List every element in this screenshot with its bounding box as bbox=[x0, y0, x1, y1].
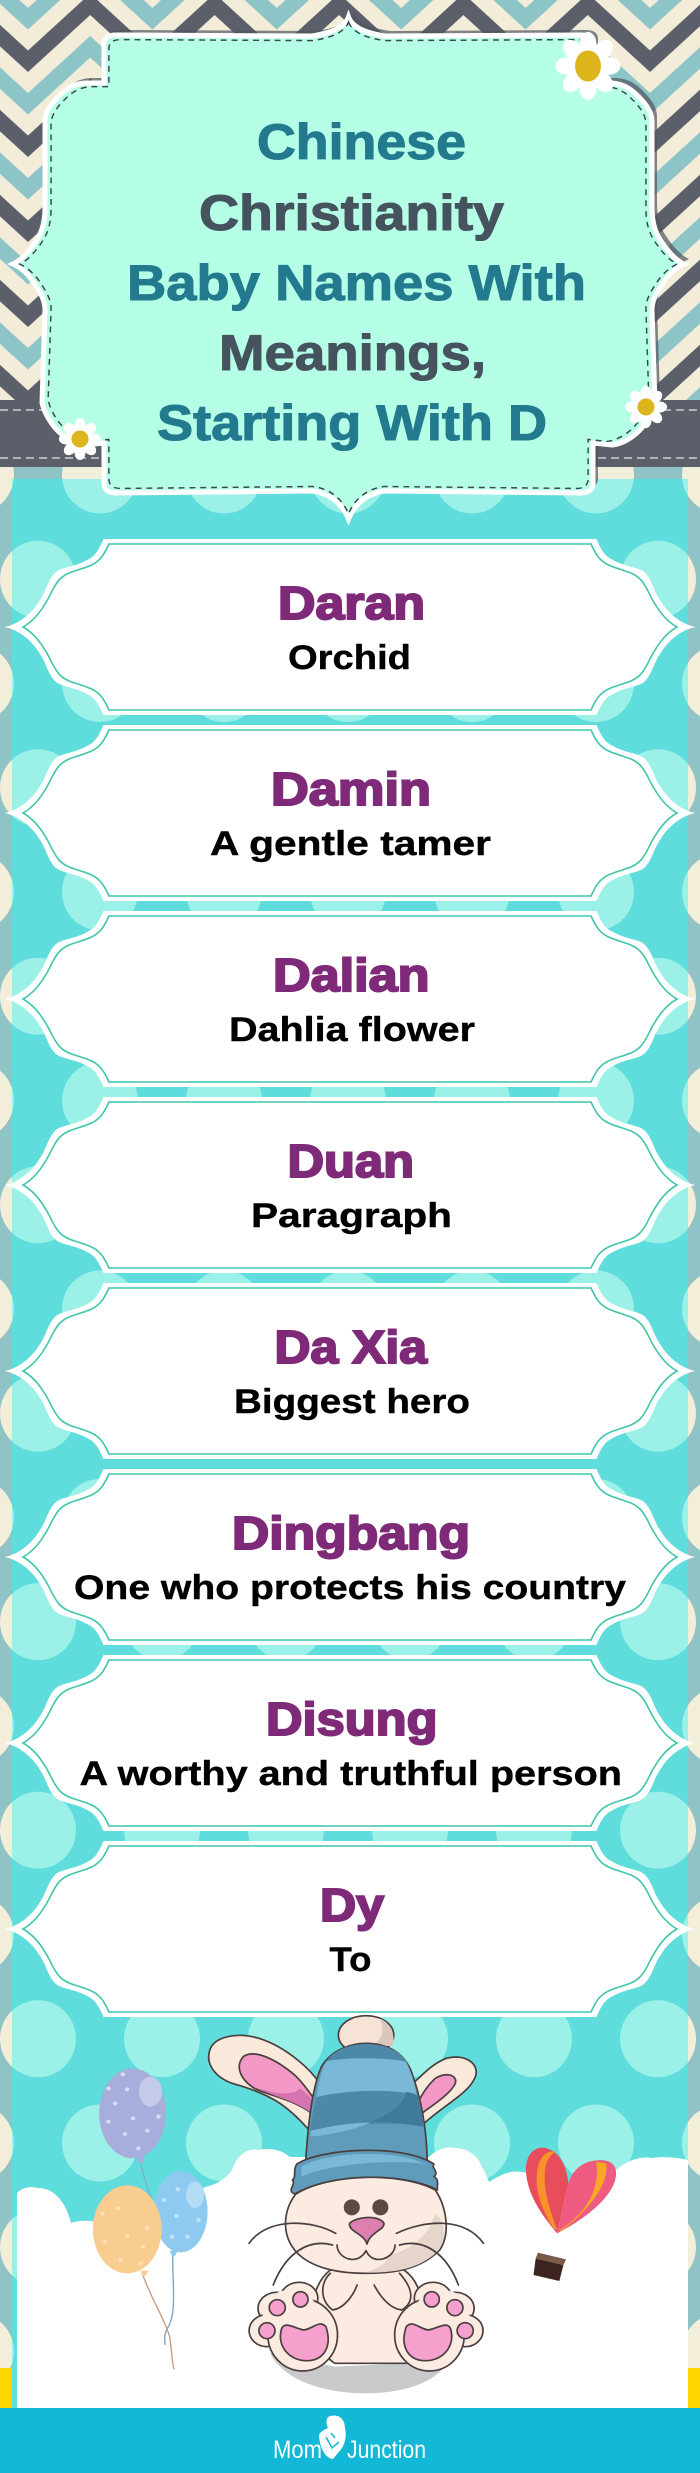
footer bar bbox=[0, 2408, 700, 2473]
title: Meanings, bbox=[219, 325, 486, 381]
panel: Duan: Paragraph bbox=[251, 1197, 452, 1235]
title: Baby Names With bbox=[127, 255, 586, 311]
panel: Damin: Damin bbox=[271, 763, 431, 815]
logo: MomJunction: Mom bbox=[273, 2436, 322, 2464]
icon: daisy left bbox=[59, 418, 101, 460]
chevron header background bbox=[0, 0, 700, 467]
panel: Daran: Orchid bbox=[288, 639, 411, 677]
panel: Da Xia bbox=[4, 1283, 696, 1459]
panel: Dalian: Dalian bbox=[273, 949, 430, 1001]
panel: Dy: Dy bbox=[320, 1879, 384, 1931]
panel: Da Xia: Da Xia bbox=[274, 1321, 427, 1373]
panel: Duan: Duan bbox=[288, 1135, 414, 1187]
panel: Dy bbox=[4, 1841, 696, 2017]
panel: Daran: Daran bbox=[278, 577, 425, 629]
panel: Dingbang: One who protects his country bbox=[74, 1569, 626, 1607]
title: Chinese bbox=[257, 114, 466, 170]
polka dot background bbox=[0, 467, 700, 2408]
panel: Dingbang bbox=[4, 1469, 696, 1645]
icon: daisy top right bbox=[555, 32, 621, 100]
icon: balloons bbox=[93, 2068, 208, 2369]
panel: Daran bbox=[4, 539, 696, 715]
icon: heart hot-air balloon bbox=[526, 2148, 616, 2281]
title: Christianity bbox=[199, 185, 504, 241]
panel: Disung: A worthy and truthful person bbox=[80, 1755, 622, 1793]
panel: Damin bbox=[4, 725, 696, 901]
logo: MomJunction: Junction bbox=[347, 2436, 426, 2464]
panel: Dalian: Dahlia flower bbox=[229, 1011, 475, 1049]
title: Starting With D bbox=[157, 395, 547, 451]
icon: daisy right bbox=[625, 386, 667, 428]
panel: Disung bbox=[4, 1655, 696, 1831]
illustration bbox=[93, 2016, 616, 2393]
panel: Dy: To bbox=[330, 1941, 372, 1979]
panel: Dingbang: Dingbang bbox=[232, 1507, 470, 1559]
title bbox=[127, 114, 586, 451]
white clouds bbox=[17, 2147, 688, 2408]
icon: bunny bbox=[209, 2016, 483, 2393]
icon: mother and child bbox=[319, 2415, 346, 2459]
panel: Dalian bbox=[4, 911, 696, 1087]
panel: Disung: Disung bbox=[266, 1693, 438, 1745]
panel: Damin: A gentle tamer bbox=[210, 825, 491, 863]
panel: Duan bbox=[4, 1097, 696, 1273]
title panel bbox=[13, 12, 689, 519]
panel: Da Xia: Biggest hero bbox=[234, 1383, 470, 1421]
logo: MomJunction bbox=[273, 2415, 426, 2464]
